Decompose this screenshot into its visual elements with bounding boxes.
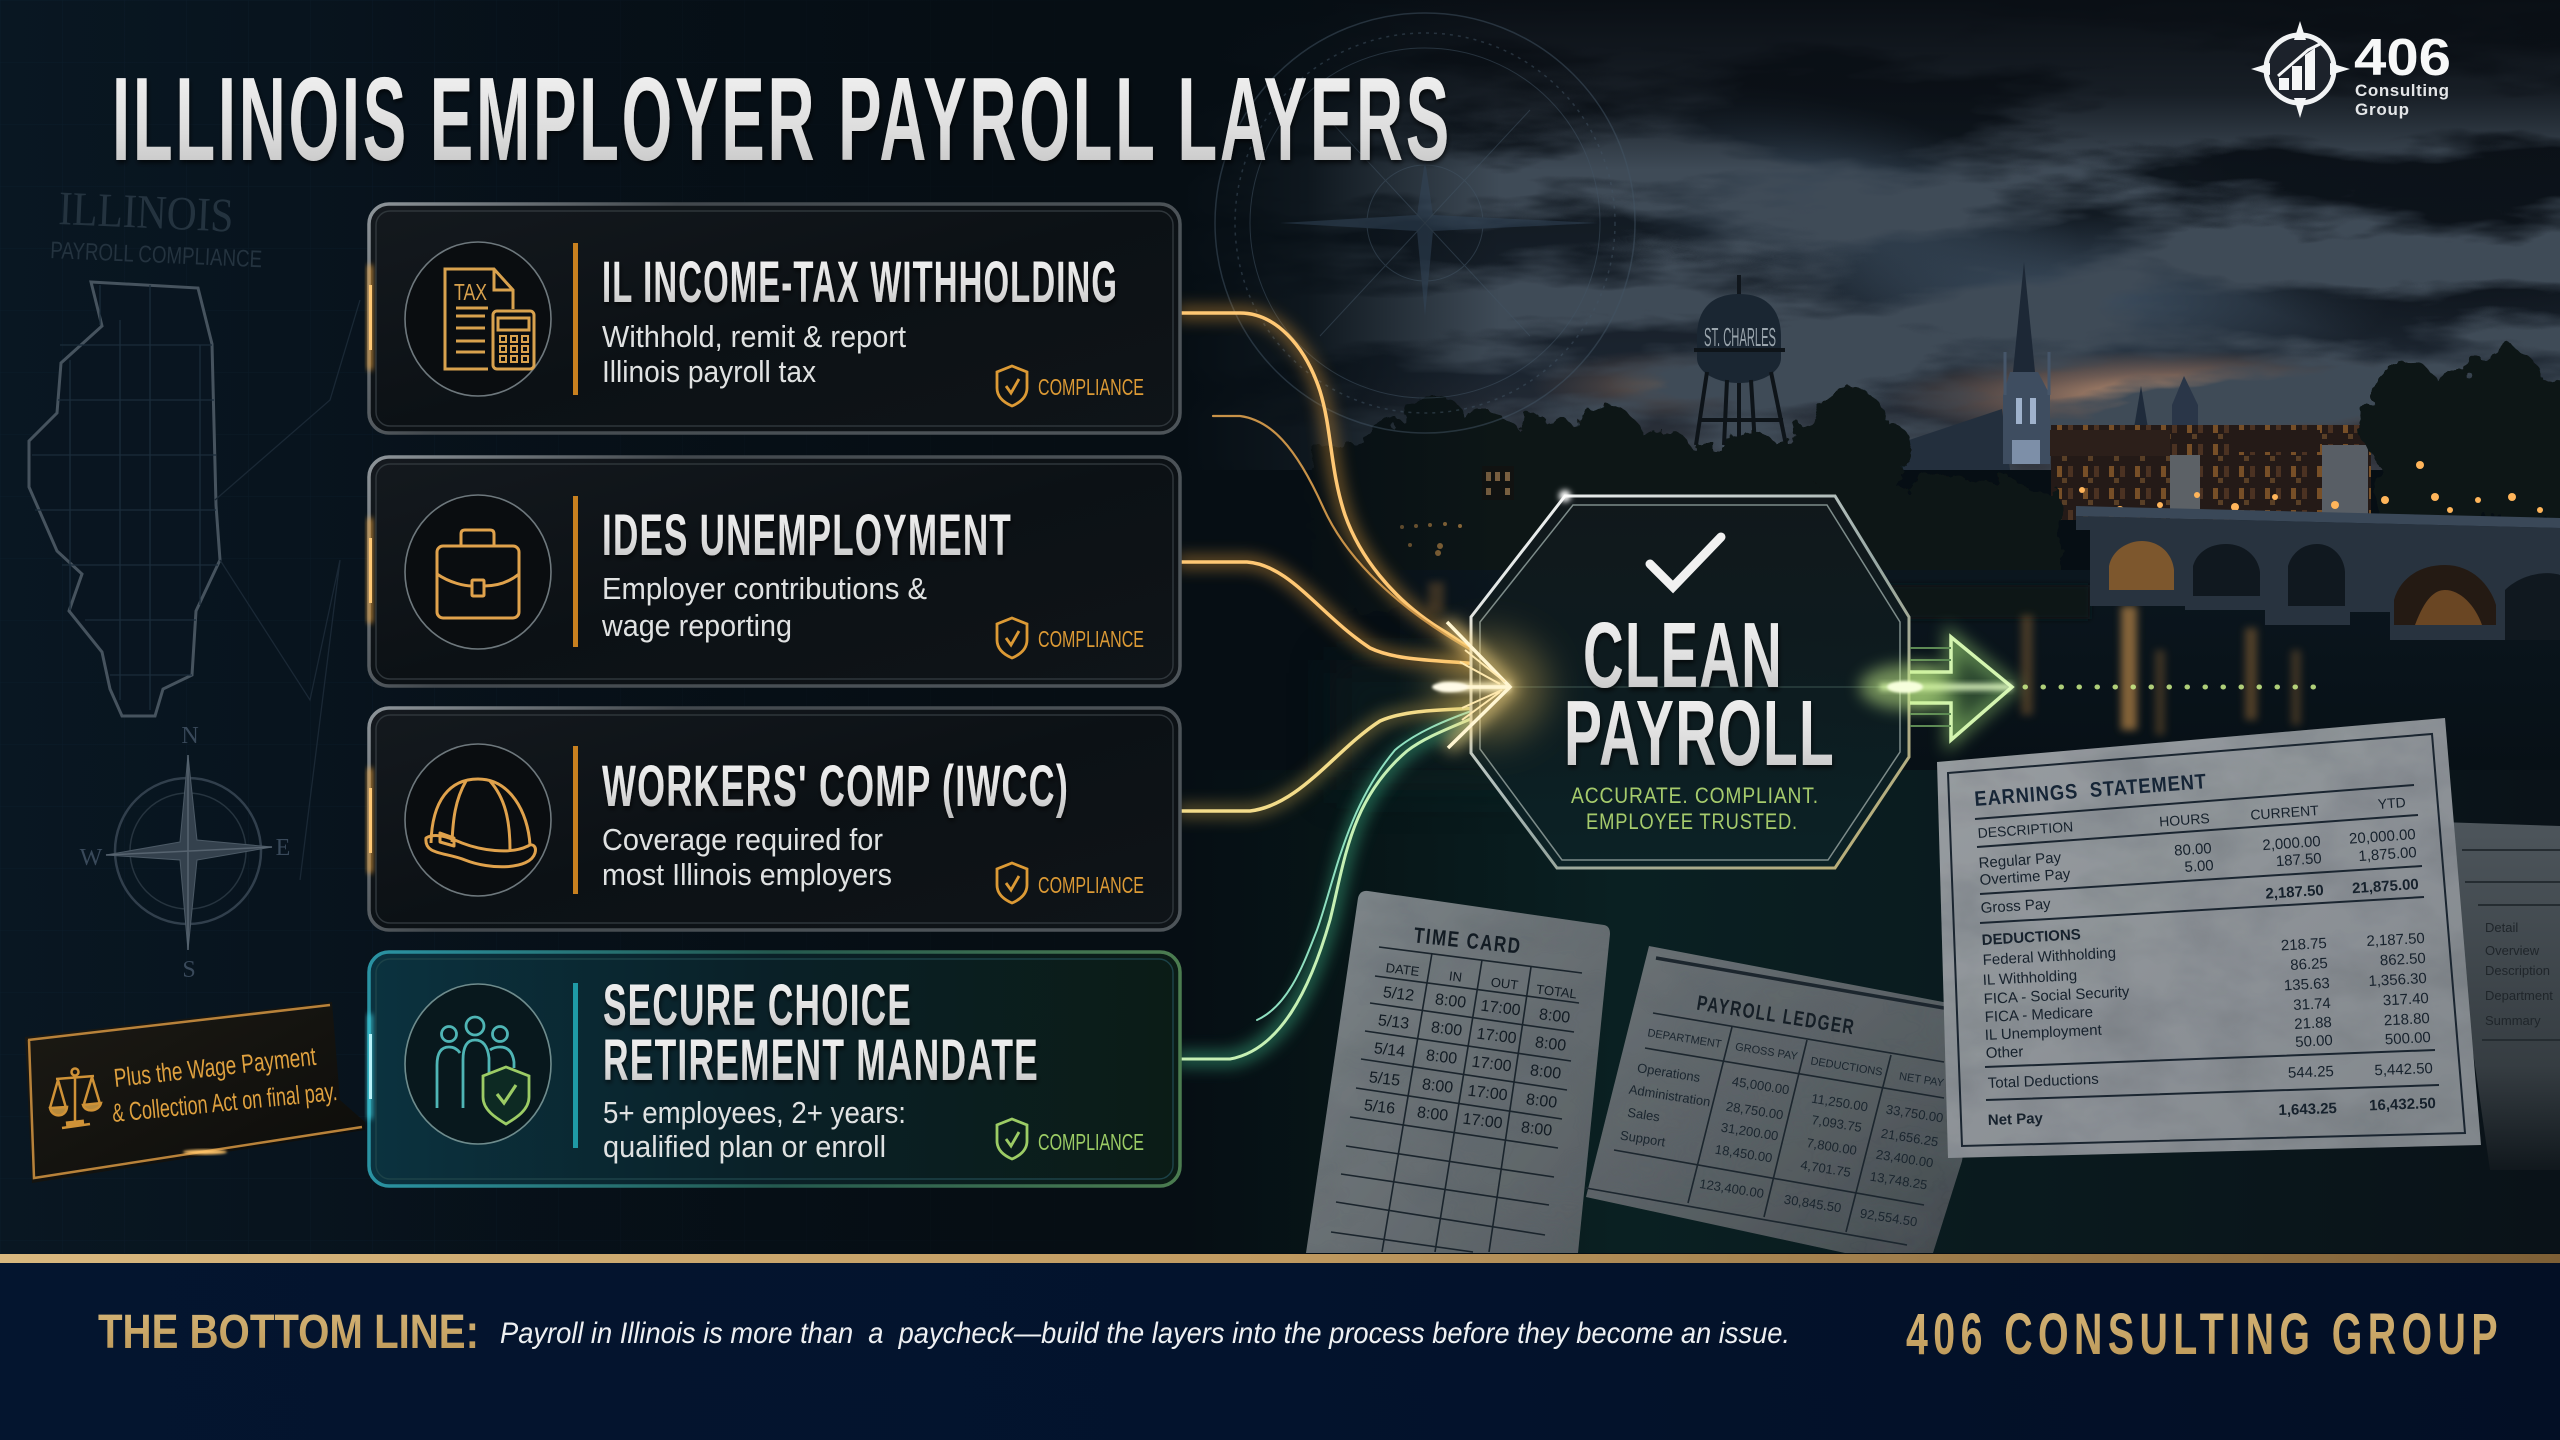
statement values: 544.25 bbox=[2288, 1063, 2334, 1082]
statement values: 1,643.25 bbox=[2278, 1100, 2337, 1119]
document: time card: 17:00 bbox=[1462, 1111, 1504, 1132]
description: most Illinois employers bbox=[602, 857, 892, 892]
document: payroll ledger bbox=[1586, 946, 1985, 1253]
time card grid bbox=[1331, 947, 1582, 1252]
card 2: IDES unemployment bbox=[368, 457, 1180, 686]
document: payroll ledger: DEDUCTIONS bbox=[1810, 1055, 1883, 1079]
document: payroll ledger: 33,750.00 bbox=[1885, 1102, 1944, 1125]
Clean Payroll heading: PAYROLL bbox=[1564, 681, 1835, 785]
document: payroll ledger: 123,400.00 bbox=[1698, 1176, 1765, 1201]
background document: faded paper behind statement: Overview bbox=[2485, 943, 2540, 958]
statement values: 218.80 bbox=[2383, 1010, 2430, 1029]
statement values: 31.74 bbox=[2293, 995, 2331, 1014]
description bbox=[602, 822, 892, 892]
statement values: 86.25 bbox=[2290, 955, 2328, 974]
logo wordmark: 406 bbox=[2354, 29, 2451, 87]
statement labels: DEDUCTIONS bbox=[1981, 926, 2081, 949]
statement values: 1,875.00 bbox=[2358, 844, 2417, 865]
statement labels: Gross Pay bbox=[1980, 896, 2052, 917]
statement values bbox=[2159, 794, 2436, 1119]
blueprint: compass rose: S bbox=[182, 957, 196, 983]
compliance badge bbox=[997, 618, 1144, 658]
statement values: 5.00 bbox=[2184, 857, 2214, 876]
statement values: 80.00 bbox=[2174, 840, 2212, 860]
far-bank house and lights bbox=[1400, 466, 1514, 556]
blueprint: compass rose bbox=[80, 723, 290, 983]
connector: workers' comp bbox=[1180, 708, 1480, 811]
background document: faded paper behind statement bbox=[2440, 822, 2560, 1170]
heading bbox=[603, 973, 1039, 1093]
connector: IDES bbox=[1180, 562, 1480, 664]
icon: check mark bbox=[1650, 537, 1721, 587]
description: Employer contributions & bbox=[602, 571, 927, 606]
blueprint: faint ILLINOIS heading bbox=[50, 182, 263, 273]
statement values: 5,442.50 bbox=[2374, 1060, 2433, 1079]
blueprint: Illinois state outline map bbox=[29, 282, 360, 880]
document: time card: 5/16 bbox=[1363, 1097, 1396, 1118]
card 4: Secure Choice retirement mandate bbox=[368, 952, 1180, 1186]
blueprint: compass rose: E bbox=[276, 835, 290, 861]
statement labels bbox=[1977, 818, 2130, 1129]
statement values: 2,000.00 bbox=[2262, 833, 2321, 854]
blueprint: faint ILLINOIS heading: ILLINOIS bbox=[58, 182, 235, 243]
Clean Payroll heading: CLEAN bbox=[1583, 603, 1783, 707]
card 3: workers' comp bbox=[368, 708, 1180, 930]
document: time card: 17:00 bbox=[1467, 1083, 1509, 1104]
statement labels: Total Deductions bbox=[1988, 1071, 2099, 1092]
statement labels: DESCRIPTION bbox=[1977, 818, 2074, 841]
description bbox=[603, 1095, 906, 1164]
description: 5+ employees, 2+ years: bbox=[603, 1095, 906, 1130]
icon: team with shield bbox=[437, 1017, 529, 1124]
document: time card: OUT bbox=[1490, 974, 1519, 993]
The Bottom Line label: THE BOTTOM LINE: bbox=[98, 1306, 479, 1359]
stone arch bridge bbox=[2076, 506, 2560, 640]
document: time card: 8:00 bbox=[1520, 1119, 1553, 1140]
statement values: 1,356.30 bbox=[2368, 970, 2427, 990]
document: time card: 5/15 bbox=[1368, 1069, 1401, 1090]
heading: WORKERS' COMP (IWCC) bbox=[602, 754, 1069, 819]
compliance badge bbox=[997, 863, 1144, 903]
document: time card: 8:00 bbox=[1534, 1034, 1567, 1055]
heading: RETIREMENT MANDATE bbox=[603, 1028, 1039, 1093]
heading: IL INCOME-TAX WITHHOLDING bbox=[602, 250, 1118, 315]
statement labels: FICA - Medicare bbox=[1984, 1004, 2093, 1026]
church with spire bbox=[1900, 262, 2050, 470]
water tower bbox=[1694, 275, 1786, 445]
statement values: 2,187.50 bbox=[2366, 930, 2425, 950]
description bbox=[602, 319, 906, 389]
document: payroll ledger: 7,093.75 bbox=[1811, 1112, 1863, 1135]
logo: 406 Consulting Group bbox=[2251, 21, 2451, 119]
connector: secondary thin gold bbox=[1213, 416, 1480, 655]
blueprint: compass rose: N bbox=[181, 723, 199, 749]
connectors: glowing lines from cards to Clean Payroll bbox=[1180, 313, 1480, 1059]
compliance badge bbox=[997, 366, 1144, 406]
plaque text: & Collection Act on final pay. bbox=[111, 1076, 339, 1128]
statement values: 50.00 bbox=[2295, 1032, 2333, 1051]
document: time card: 17:00 bbox=[1471, 1054, 1513, 1075]
document: time card: 8:00 bbox=[1416, 1104, 1449, 1125]
heading: SECURE CHOICE bbox=[603, 973, 912, 1038]
document: payroll ledger: GROSS PAY bbox=[1734, 1041, 1799, 1063]
logo wordmark bbox=[2354, 29, 2451, 119]
statement labels: Overtime Pay bbox=[1979, 866, 2071, 889]
document: time card: TIME CARD bbox=[1413, 922, 1523, 959]
logo wordmark: Group bbox=[2355, 100, 2409, 119]
compliance badge: COMPLIANCE bbox=[1038, 626, 1144, 652]
document: time card: 8:00 bbox=[1529, 1062, 1562, 1083]
card 1: IL income-tax withholding bbox=[368, 204, 1180, 433]
document: earnings statement: EARNINGS STATEMENT bbox=[1974, 770, 2208, 811]
document: time card: 17:00 bbox=[1476, 1026, 1518, 1047]
compliance badge: COMPLIANCE bbox=[1038, 1129, 1144, 1155]
document: payroll ledger: 23,400.00 bbox=[1875, 1147, 1934, 1170]
gold rule bbox=[0, 1254, 2560, 1263]
statement labels: Other bbox=[1985, 1043, 2024, 1062]
document: payroll ledger: 28,750.00 bbox=[1725, 1099, 1784, 1122]
statement labels: FICA - Social Security bbox=[1983, 983, 2130, 1008]
document: payroll ledger: Administration bbox=[1628, 1082, 1712, 1109]
document: payroll ledger: 21,656.25 bbox=[1880, 1126, 1939, 1149]
statement labels: Federal Withholding bbox=[1982, 945, 2116, 969]
document: time card: 8:00 bbox=[1525, 1091, 1558, 1112]
blueprint: faint ILLINOIS heading: PAYROLL COMPLIANCE bbox=[50, 237, 263, 273]
icon: tax document and calculator: TAX bbox=[454, 279, 487, 305]
document: time card: TOTAL bbox=[1535, 982, 1578, 1001]
document: earnings statement bbox=[1937, 718, 2481, 1158]
statement values: 218.75 bbox=[2280, 935, 2327, 954]
description: wage reporting bbox=[601, 608, 792, 643]
document: payroll ledger: Operations bbox=[1636, 1060, 1702, 1085]
blueprint: compass rose: W bbox=[80, 845, 103, 871]
lower-right dark panel behind documents bbox=[1180, 770, 2560, 1253]
document: payroll ledger: 13,748.25 bbox=[1869, 1169, 1928, 1192]
tagline bbox=[1571, 783, 1819, 834]
river water bbox=[1400, 570, 2560, 770]
document: payroll ledger: PAYROLL LEDGER bbox=[1695, 992, 1857, 1039]
arrow: green output arrow with dotted trail bbox=[1860, 637, 2325, 740]
background document: faded paper behind statement: Detail bbox=[2485, 920, 2518, 935]
town buildings bbox=[2050, 376, 2371, 520]
document: time card: 8:00 bbox=[1425, 1047, 1458, 1068]
photo scene: St. Charles skyline at dusk: ST. CHARLES bbox=[1704, 322, 1776, 352]
document: time card: DATE bbox=[1385, 960, 1421, 979]
statement labels: IL Withholding bbox=[1982, 967, 2078, 989]
icon: tax document and calculator bbox=[445, 269, 534, 369]
tagline: EMPLOYEE TRUSTED. bbox=[1586, 809, 1798, 834]
document: payroll ledger: 92,554.50 bbox=[1859, 1206, 1918, 1229]
document: payroll ledger: 18,450.00 bbox=[1714, 1142, 1773, 1165]
document: time card: 8:00 bbox=[1538, 1006, 1571, 1027]
document: time card: 8:00 bbox=[1430, 1019, 1463, 1040]
statement values: 20,000.00 bbox=[2349, 826, 2416, 848]
plaque text: Plus the Wage Payment bbox=[112, 1041, 318, 1093]
tagline: ACCURATE. COMPLIANT. bbox=[1571, 783, 1819, 808]
document: time card bbox=[1306, 891, 1610, 1253]
statement labels: Net Pay bbox=[1988, 1110, 2044, 1129]
document: payroll ledger: 30,845.50 bbox=[1783, 1192, 1842, 1215]
description: Withhold, remit & report bbox=[602, 319, 906, 354]
document: payroll ledger: 45,000.00 bbox=[1731, 1074, 1790, 1097]
document: payroll ledger: Sales bbox=[1626, 1105, 1661, 1125]
statement values: 2,187.50 bbox=[2265, 882, 2324, 903]
footer bar bbox=[0, 1254, 2560, 1440]
statement values: YTD bbox=[2377, 794, 2406, 812]
document: payroll ledger: 4,701.75 bbox=[1800, 1157, 1852, 1180]
statement rules bbox=[1975, 785, 2439, 1100]
arrow: chevron entering badge bbox=[1432, 622, 1545, 748]
connector: income tax bbox=[1180, 313, 1480, 655]
plaque text bbox=[111, 1041, 339, 1128]
Clean Payroll heading bbox=[1564, 603, 1835, 785]
document: time card: 17:00 bbox=[1480, 998, 1522, 1019]
document: time card: 8:00 bbox=[1434, 991, 1467, 1012]
background document: faded paper behind statement: Description bbox=[2485, 963, 2550, 978]
compliance badge: COMPLIANCE bbox=[1038, 872, 1144, 898]
statement values: CURRENT bbox=[2250, 802, 2320, 823]
dotted trail bbox=[2025, 684, 2325, 690]
connector: secure choice bbox=[1180, 708, 1480, 1059]
icon: hard hat bbox=[426, 779, 535, 867]
document: payroll ledger: 31,200.00 bbox=[1720, 1120, 1779, 1143]
icon: briefcase bbox=[437, 530, 519, 618]
document: time card: IN bbox=[1448, 968, 1463, 985]
badge: Clean Payroll octagon bbox=[1471, 490, 1909, 868]
statement labels: Regular Pay bbox=[1978, 849, 2062, 872]
statement values: 317.40 bbox=[2382, 990, 2429, 1009]
statement values: HOURS bbox=[2159, 810, 2210, 830]
statement values: 16,432.50 bbox=[2369, 1095, 2436, 1114]
plaque: Wage Payment Act note bbox=[25, 1002, 365, 1183]
document: time card: 8:00 bbox=[1421, 1076, 1454, 1097]
statement values: 500.00 bbox=[2384, 1029, 2431, 1048]
description: qualified plan or enroll bbox=[603, 1129, 886, 1164]
sky bbox=[1180, 0, 2560, 470]
description: Coverage required for bbox=[602, 822, 883, 857]
compliance badge bbox=[997, 1119, 1144, 1159]
background document: faded paper behind statement: Department bbox=[2485, 988, 2553, 1003]
ledger grid bbox=[1586, 958, 1944, 1245]
statement values: 862.50 bbox=[2379, 950, 2426, 969]
document: payroll ledger: NET PAY bbox=[1898, 1071, 1945, 1090]
trees and riverbank silhouette bbox=[1310, 347, 2560, 610]
soft left vignette of the scene bbox=[1180, 0, 1500, 770]
logo wordmark: Consulting bbox=[2355, 81, 2449, 100]
background document: faded paper behind statement: Summary bbox=[2485, 1013, 2541, 1028]
document: time card: 5/13 bbox=[1377, 1012, 1410, 1033]
heading: IDES UNEMPLOYMENT bbox=[602, 503, 1012, 568]
bottom line statement: Payroll in Illinois is more than a paycheck—build the layers into the process before they become an issue. bbox=[500, 1317, 1790, 1350]
compliance badge: COMPLIANCE bbox=[1038, 374, 1144, 400]
document: time card: 5/12 bbox=[1382, 984, 1415, 1005]
title: ILLINOIS EMPLOYER PAYROLL LAYERS bbox=[112, 53, 1452, 186]
statement values: 135.63 bbox=[2283, 975, 2330, 994]
document: payroll ledger: 7,800.00 bbox=[1806, 1135, 1858, 1158]
icon: scales of justice bbox=[50, 1068, 101, 1128]
statement values: 187.50 bbox=[2275, 850, 2322, 870]
description: Illinois payroll tax bbox=[602, 354, 816, 389]
street lights bbox=[2079, 461, 2543, 514]
document: payroll ledger: DEPARTMENT bbox=[1647, 1027, 1723, 1051]
photo scene: St. Charles skyline at dusk bbox=[1180, 0, 2560, 770]
description bbox=[601, 571, 927, 643]
statement labels: IL Unemployment bbox=[1984, 1022, 2103, 1044]
statement values: 21,875.00 bbox=[2352, 876, 2419, 897]
logo mark: compass with bar chart bbox=[2251, 21, 2350, 118]
document: payroll ledger: Support bbox=[1619, 1128, 1667, 1150]
document: time card: 5/14 bbox=[1373, 1040, 1406, 1061]
statement values: 21.88 bbox=[2294, 1014, 2332, 1033]
blueprint: large faint compass at top center bbox=[1215, 13, 1635, 433]
document: payroll ledger: 11,250.00 bbox=[1810, 1091, 1869, 1114]
